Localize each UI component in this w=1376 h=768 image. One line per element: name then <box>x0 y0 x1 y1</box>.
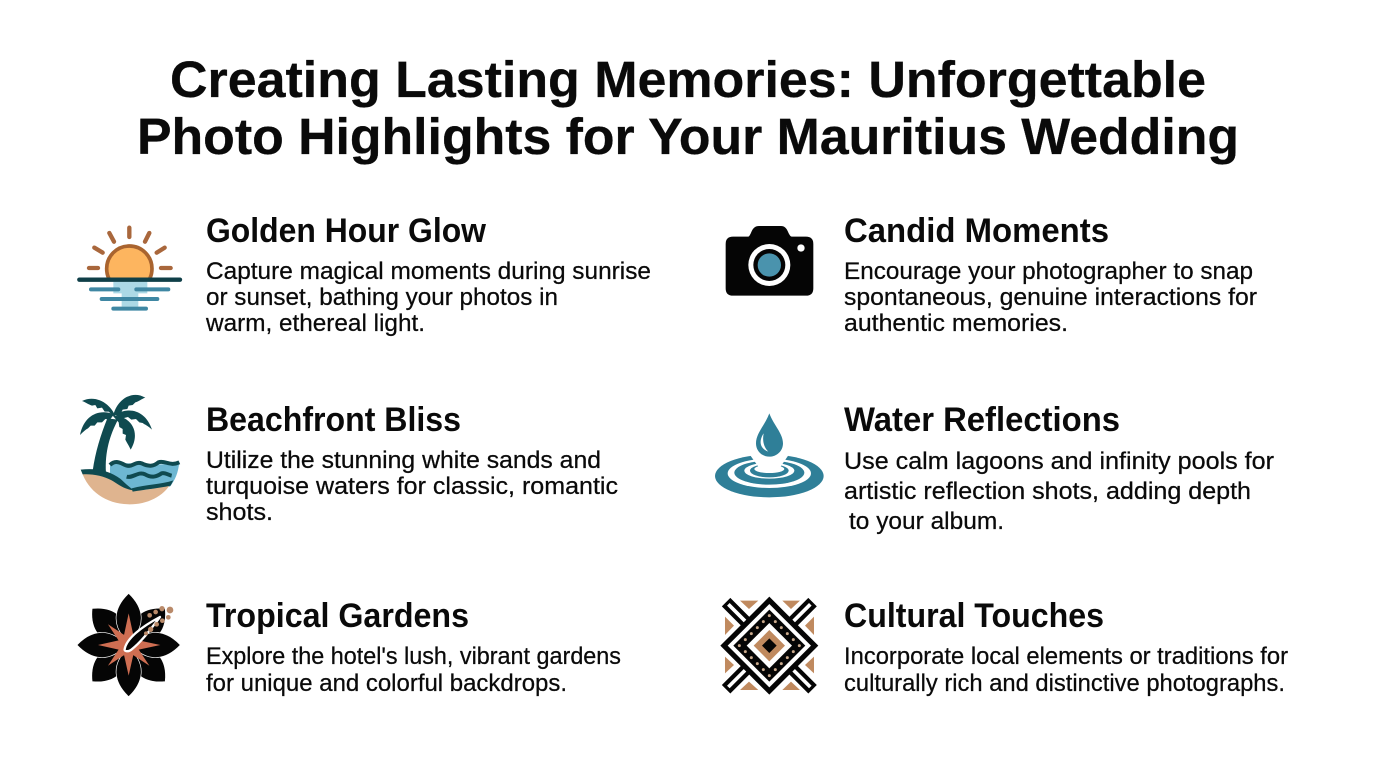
title <box>137 51 1239 165</box>
icon: camera <box>726 226 813 296</box>
heading: Tropical Gardens <box>206 597 469 635</box>
title: Creating Lasting Memories: Unforgettable <box>170 51 1206 108</box>
body text: spontaneous, genuine interactions for <box>844 284 1257 311</box>
panel: water reflections <box>715 401 1274 535</box>
panel: beachfront bliss <box>80 395 618 526</box>
body text: to your album. <box>849 508 1004 535</box>
body text: shots. <box>206 499 273 526</box>
icon: sunset over water <box>79 228 180 309</box>
body text <box>844 448 1274 535</box>
panel: candid moments <box>726 212 1257 337</box>
body text: Encourage your photographer to snap <box>844 258 1253 285</box>
heading: Golden Hour Glow <box>206 212 487 250</box>
body text <box>206 447 618 526</box>
panel: cultural touches <box>720 597 1288 697</box>
body text: Incorporate local elements or traditions for <box>844 643 1288 670</box>
body text <box>844 258 1257 337</box>
heading: Beachfront Bliss <box>206 401 461 439</box>
body text <box>205 258 651 337</box>
body text: Explore the hotel's lush, vibrant gardens <box>206 643 621 670</box>
body text: artistic reflection shots, adding depth <box>844 478 1251 505</box>
body text: culturally rich and distinctive photographs. <box>844 670 1285 697</box>
body text <box>206 643 621 697</box>
icon: water drop and ripples <box>715 413 824 497</box>
heading: Cultural Touches <box>844 597 1104 635</box>
body text: warm, ethereal light. <box>205 310 425 337</box>
heading: Candid Moments <box>844 212 1109 250</box>
panel: tropical gardens <box>77 593 621 697</box>
title: Photo Highlights for Your Mauritius Wedding <box>137 108 1239 165</box>
body text <box>844 643 1288 697</box>
body text: Use calm lagoons and infinity pools for <box>844 448 1274 475</box>
body text: turquoise waters for classic, romantic <box>206 473 618 500</box>
body text: or sunset, bathing your photos in <box>206 284 558 311</box>
icon: hibiscus flower <box>77 593 180 697</box>
panel: golden hour glow <box>79 212 651 337</box>
heading: Water Reflections <box>844 401 1120 439</box>
body text: Utilize the stunning white sands and <box>206 447 601 474</box>
body text: for unique and colorful backdrops. <box>206 670 567 697</box>
icon: geometric cultural pattern <box>720 597 818 695</box>
icon: palm tree on beach <box>80 395 179 504</box>
body text: Capture magical moments during sunrise <box>206 258 651 285</box>
body text: authentic memories. <box>844 310 1068 337</box>
